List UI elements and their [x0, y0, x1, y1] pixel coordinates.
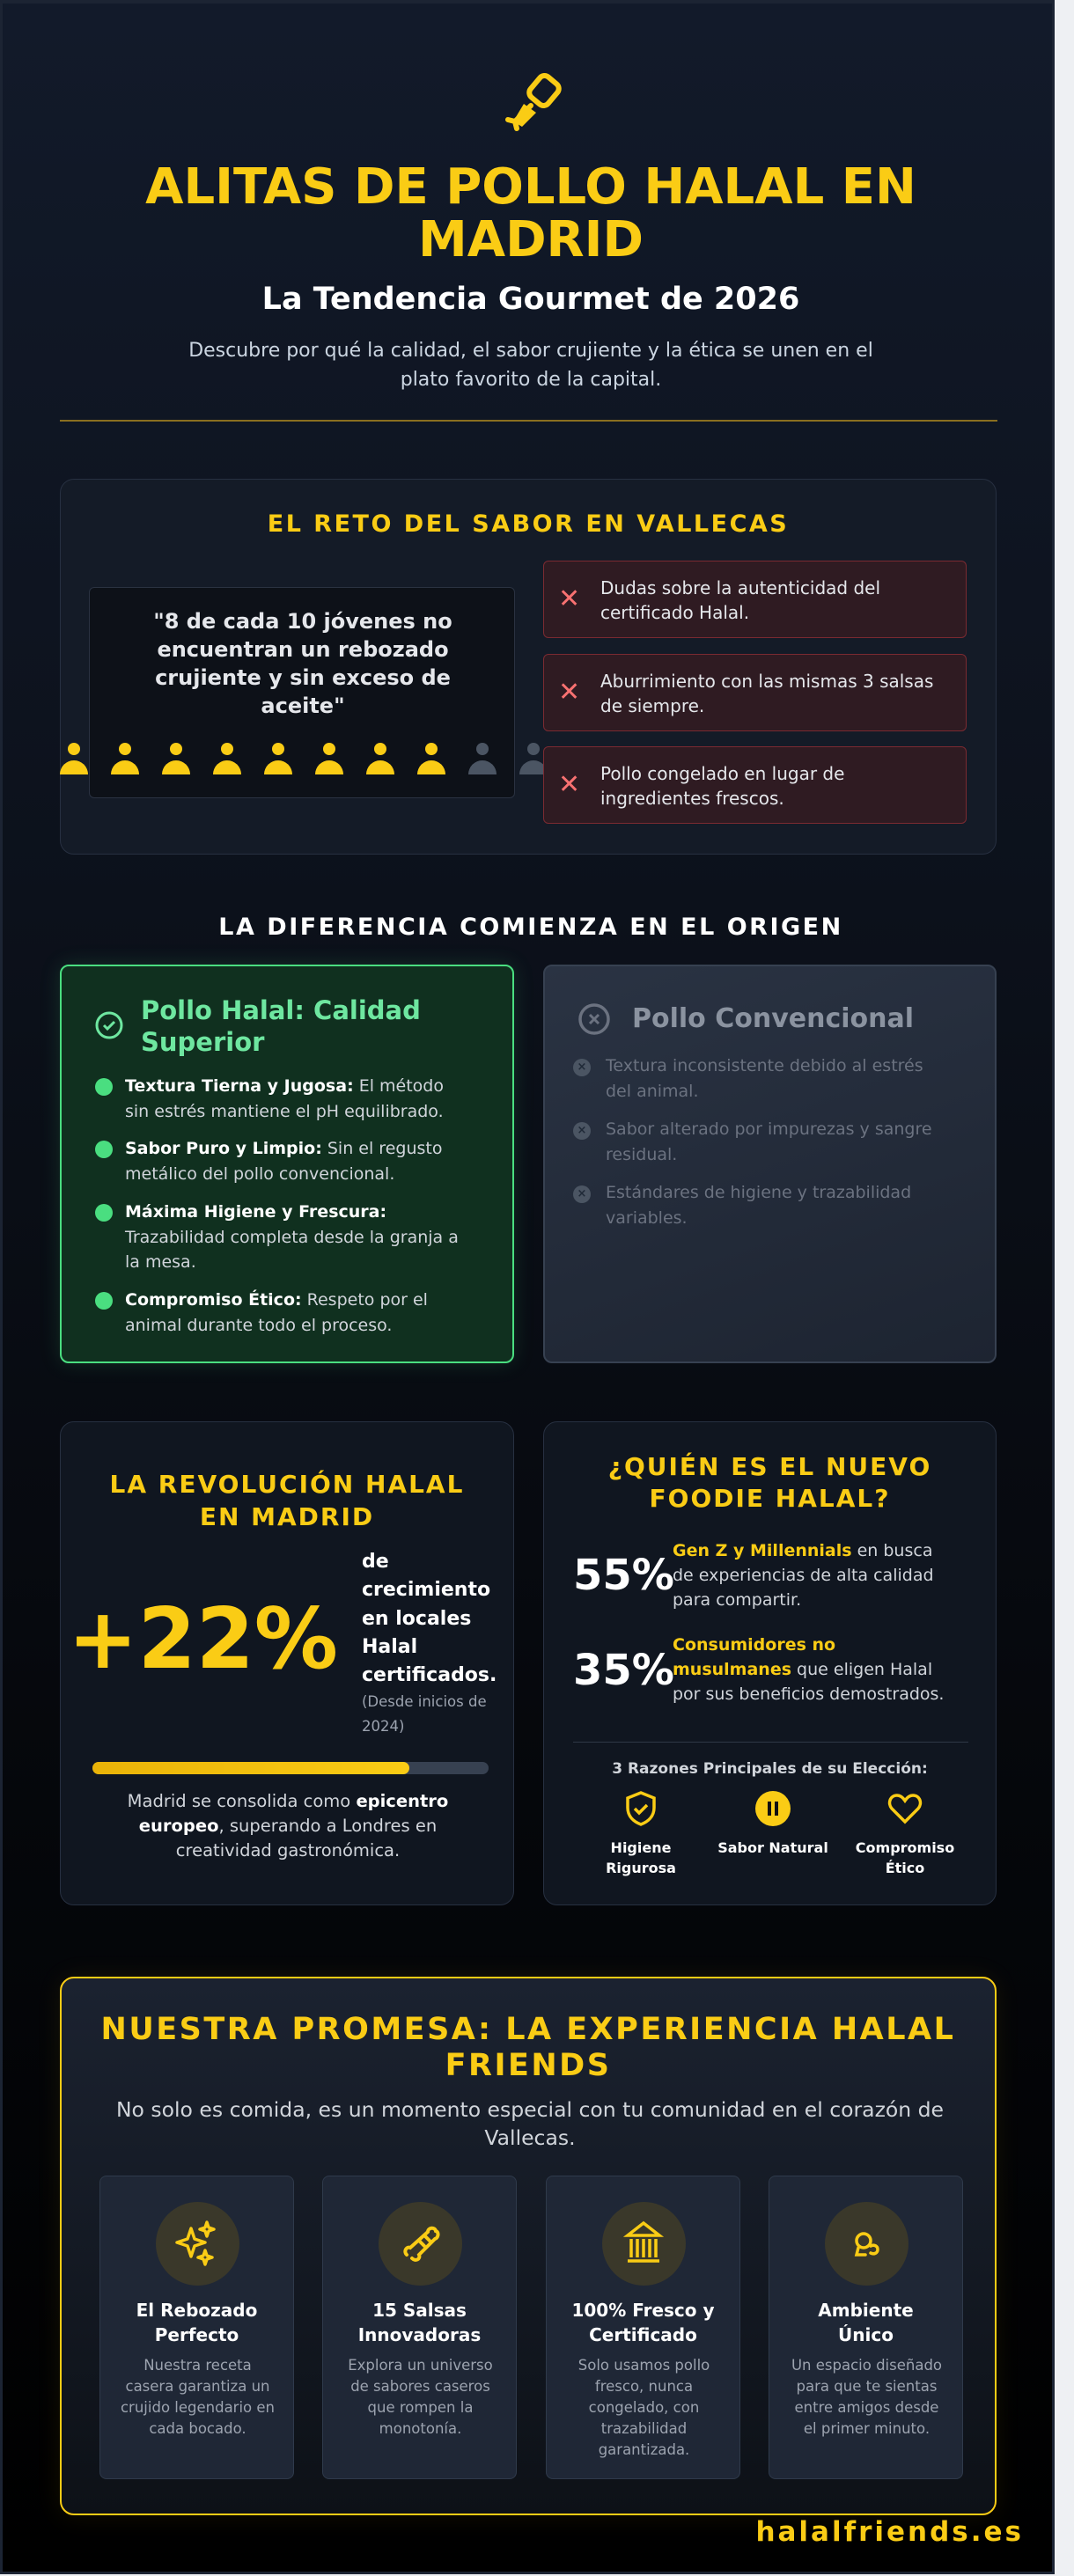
reason: higiene: Higiene: [611, 1839, 671, 1856]
big stat +22%: +22%: [68, 1591, 338, 1688]
problem item 2: [543, 654, 967, 731]
drawback 2: Sabor alterado por impurezas y sangre residual.: [606, 1119, 932, 1163]
benefit 4: Compromiso Ético: Respeto por el animal durante todo el proceso.: [125, 1290, 428, 1334]
icon: ambiente: [825, 2202, 908, 2286]
panel heading: FRIENDS: [445, 2048, 611, 2083]
card title: Pollo Convencional: [632, 1003, 914, 1034]
problem item 3: ingredientes frescos.: [600, 788, 784, 809]
intro text: Descubre por qué la calidad, el sabor crujiente y la ética se unen en el: [188, 340, 873, 362]
panel heading: [608, 1452, 931, 1513]
problem item 1: [543, 561, 967, 638]
feature card: ambiente: Único: [838, 2324, 894, 2345]
benefit 1: [95, 1076, 444, 1121]
panel subtitle: No solo es comida, es un momento especial con tu comunidad en el corazón de Vallecas.: [116, 2097, 944, 2150]
intro text: [188, 340, 873, 391]
drawback 3: Estándares de higiene y trazabilidad variables.: [606, 1183, 911, 1227]
feature card: rebozado: casera garantiza un crujido legendario en cada bocado.: [121, 2378, 275, 2437]
feature card: ambiente: Ambiente: [818, 2300, 914, 2321]
feature card: rebozado: Perfecto: [155, 2324, 239, 2345]
feature card: salsas: Innovadoras: [358, 2324, 481, 2345]
feature card: fresco: fresco, nunca: [595, 2378, 693, 2395]
benefit 2: Sabor Puro y Limpio: Sin el regusto metálico del pollo convencional.: [125, 1139, 442, 1183]
panel heading: ¿QUIÉN ES EL NUEVO: [608, 1452, 931, 1481]
card: pollo convencional: ×: [577, 1187, 586, 1200]
stat 55% text: Gen Z y Millennials en busca: [673, 1541, 932, 1560]
title: [145, 158, 916, 268]
card title: Superior: [141, 1027, 264, 1057]
feature card: salsas: que rompen la monotonía.: [368, 2399, 473, 2437]
reason: higiene: [606, 1791, 676, 1876]
reasons heading: 3 Razones Principales de su Elección:: [612, 1760, 928, 1778]
card title: Pollo Halal: Calidad: [141, 995, 421, 1025]
stat 55%: 55%: [573, 1551, 674, 1600]
stat 35% text: [673, 1635, 944, 1704]
panel heading: EL RETO DEL SABOR EN VALLECAS: [268, 510, 789, 538]
stat 35% text: por sus beneficios demostrados.: [673, 1684, 944, 1704]
problem item 2: ✕: [558, 677, 580, 708]
problem item 1: ✕: [558, 583, 580, 614]
problem item 1: Dudas sobre la autenticidad del certificado Halal.: [600, 577, 880, 623]
panel: el reto del sabor: [60, 479, 997, 855]
feature card: rebozado: [99, 2176, 294, 2479]
feature card: ambiente: entre amigos desde: [795, 2399, 938, 2416]
stat description: (Desde inicios de 2024): [362, 1693, 487, 1735]
problem item 3: Pollo congelado en lugar de: [600, 763, 844, 784]
panel heading: LA REVOLUCIÓN HALAL: [110, 1470, 464, 1499]
drawback 1: Textura inconsistente debido al estrés del animal.: [606, 1056, 923, 1100]
problem item 3: [543, 746, 967, 824]
section heading: origen: LA DIFERENCIA COMIENZA EN EL ORIGEN: [218, 914, 843, 941]
caption: Madrid se consolida como epicentro europeo, superando a Londres en creatividad gastronómica.: [128, 1791, 448, 1860]
reason: higiene: Rigurosa: [606, 1860, 676, 1876]
feature card: fresco: congelado, con trazabilidad garantizada.: [589, 2399, 699, 2458]
card: pollo convencional: [543, 965, 997, 1363]
intro text: plato favorito de la capital.: [401, 369, 661, 391]
panel: nuestra promesa: [60, 1977, 997, 2515]
quote box: [89, 587, 515, 798]
icon: x circle: [578, 1003, 610, 1035]
feature card: fresco: Certificado: [589, 2324, 697, 2345]
panel heading: NUESTRA PROMESA: LA EXPERIENCIA HALAL: [101, 2012, 955, 2047]
icon: check circle: [95, 1012, 123, 1038]
title: ALITAS DE POLLO HALAL EN: [145, 158, 916, 216]
feature card: salsas: 15 Salsas: [372, 2300, 467, 2321]
card: pollo halal: [60, 965, 514, 1363]
icon: chicken drumstick: [505, 73, 562, 131]
stat 55% text: [673, 1541, 934, 1610]
panel heading: [110, 1470, 464, 1531]
feature card: rebozado: Nuestra receta: [143, 2357, 252, 2374]
feature card: rebozado: El Rebozado: [136, 2300, 257, 2321]
panel heading: FOODIE HALAL?: [650, 1484, 890, 1513]
feature card: ambiente: el primer minuto.: [804, 2420, 930, 2437]
reason: compromiso ético: Compromiso: [856, 1839, 954, 1856]
feature card: salsas: [322, 2176, 517, 2479]
stat 35% text: Consumidores no: [673, 1635, 835, 1655]
panel: revolución halal: [60, 1421, 514, 1905]
benefit 1: Textura Tierna y Jugosa: El método: [125, 1076, 444, 1096]
feature card: ambiente: [769, 2176, 963, 2479]
reason: sabor natural: [717, 1791, 828, 1856]
feature card: fresco: [546, 2176, 740, 2479]
panel heading: [101, 2012, 955, 2083]
benefit 1: sin estrés mantiene el pH equilibrado.: [125, 1102, 444, 1121]
problem item 3: ✕: [558, 769, 580, 800]
progress bar: [92, 1762, 489, 1774]
card title: [141, 995, 421, 1057]
card: pollo convencional: ×: [577, 1124, 586, 1137]
benefit 3: [95, 1202, 459, 1272]
reason: compromiso ético: [856, 1794, 954, 1876]
stat description: de crecimiento en locales Halal certificados.: [362, 1551, 497, 1686]
subtitle: La Tendencia Gourmet de 2026: [262, 282, 799, 317]
feature card: fresco: Solo usamos pollo: [578, 2357, 710, 2374]
footer brand: halalfriends.es: [755, 2516, 1024, 2548]
feature card: fresco: 100% Fresco y: [571, 2300, 715, 2321]
icon: landmark: [602, 2202, 686, 2286]
panel: nuevo foodie halal: [543, 1421, 997, 1905]
people icons: 8 of 10: [60, 743, 543, 774]
icon: sparkles: [156, 2202, 239, 2286]
stat 35% text: musulmanes que eligen Halal: [673, 1660, 932, 1679]
card: pollo convencional: ×: [577, 1060, 586, 1074]
benefit 3: Trazabilidad completa desde la granja a la mesa.: [125, 1227, 459, 1272]
quote text: "8 de cada 10 jóvenes no encuentran un rebozado crujiente y sin exceso de aceite": [153, 609, 452, 718]
icon: sauce: [379, 2202, 462, 2286]
stat 35%: 35%: [573, 1646, 674, 1695]
problem item 2: Aburrimiento con las mismas 3 salsas de siempre.: [600, 671, 933, 716]
benefit 3: Máxima Higiene y Frescura:: [125, 1202, 386, 1222]
reason: compromiso ético: Ético: [886, 1860, 924, 1876]
feature card: ambiente: Un espacio diseñado: [791, 2357, 942, 2374]
feature card: ambiente: para que te sientas: [797, 2378, 937, 2395]
panel heading: EN MADRID: [200, 1502, 374, 1531]
feature card: salsas: de sabores caseros: [350, 2378, 490, 2395]
title: MADRID: [418, 211, 644, 268]
stat 55% text: de experiencias de alta calidad para compartir.: [673, 1566, 934, 1610]
reason: sabor natural: Sabor Natural: [717, 1839, 828, 1856]
feature card: salsas: Explora un universo: [348, 2357, 493, 2374]
